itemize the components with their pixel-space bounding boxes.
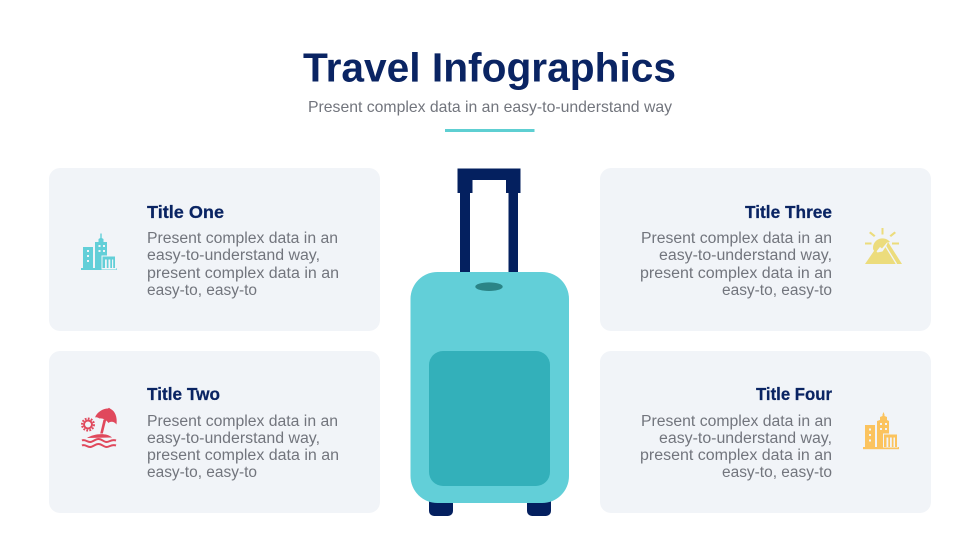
panel: title three	[600, 168, 931, 331]
icon: suitcase	[410, 168, 569, 516]
text block: title three: present complex data in an	[640, 265, 832, 282]
text block: title four: easy-to, easy-to	[722, 464, 832, 481]
title: Travel Infographics	[303, 44, 676, 90]
suitcase wheels	[429, 495, 551, 516]
heading: title two: Title Two	[147, 384, 220, 404]
icon: sun over mountain yellow	[865, 228, 902, 264]
text block: title one: present complex data in an	[147, 265, 339, 282]
suitcase front pocket	[429, 351, 550, 486]
icon: city buildings teal	[81, 234, 117, 270]
text block: title three: easy-to-understand way,	[659, 247, 832, 264]
title underline accent	[445, 129, 534, 132]
text block: title four: present complex data in an	[640, 447, 832, 464]
text block: title two: easy-to, easy-to	[147, 464, 257, 481]
panel: title one	[49, 168, 380, 331]
subtitle: Present complex data in an easy-to-understand way	[308, 99, 672, 116]
text block: title one: easy-to-understand way,	[147, 247, 320, 264]
text block: title four: Present complex data in an	[641, 413, 832, 430]
text block: title one: Present complex data in an	[147, 230, 338, 247]
heading: title four: Title Four	[756, 384, 832, 404]
text block: title two: Present complex data in an	[147, 413, 338, 430]
text block: title two: present complex data in an	[147, 447, 339, 464]
text block: title three	[640, 230, 832, 299]
text block: title one	[147, 230, 339, 299]
text block: title four	[640, 413, 832, 481]
text block: title one: easy-to, easy-to	[147, 282, 257, 299]
heading: title one: Title One	[147, 202, 224, 222]
suitcase handle	[458, 168, 520, 272]
panel: title four	[600, 351, 931, 513]
text block: title two	[147, 413, 339, 481]
suitcase handle socket	[475, 282, 503, 291]
icon: city buildings amber	[863, 412, 899, 449]
text block: title two: easy-to-understand way,	[147, 430, 320, 447]
text block: title three: Present complex data in an	[641, 230, 832, 247]
text block: title four: easy-to-understand way,	[659, 430, 832, 447]
text block: title three: easy-to, easy-to	[722, 282, 832, 299]
suitcase body	[410, 272, 569, 503]
heading: title three: Title Three	[745, 202, 832, 222]
panel: title two	[49, 351, 380, 513]
icon: beach umbrella red	[82, 408, 117, 447]
